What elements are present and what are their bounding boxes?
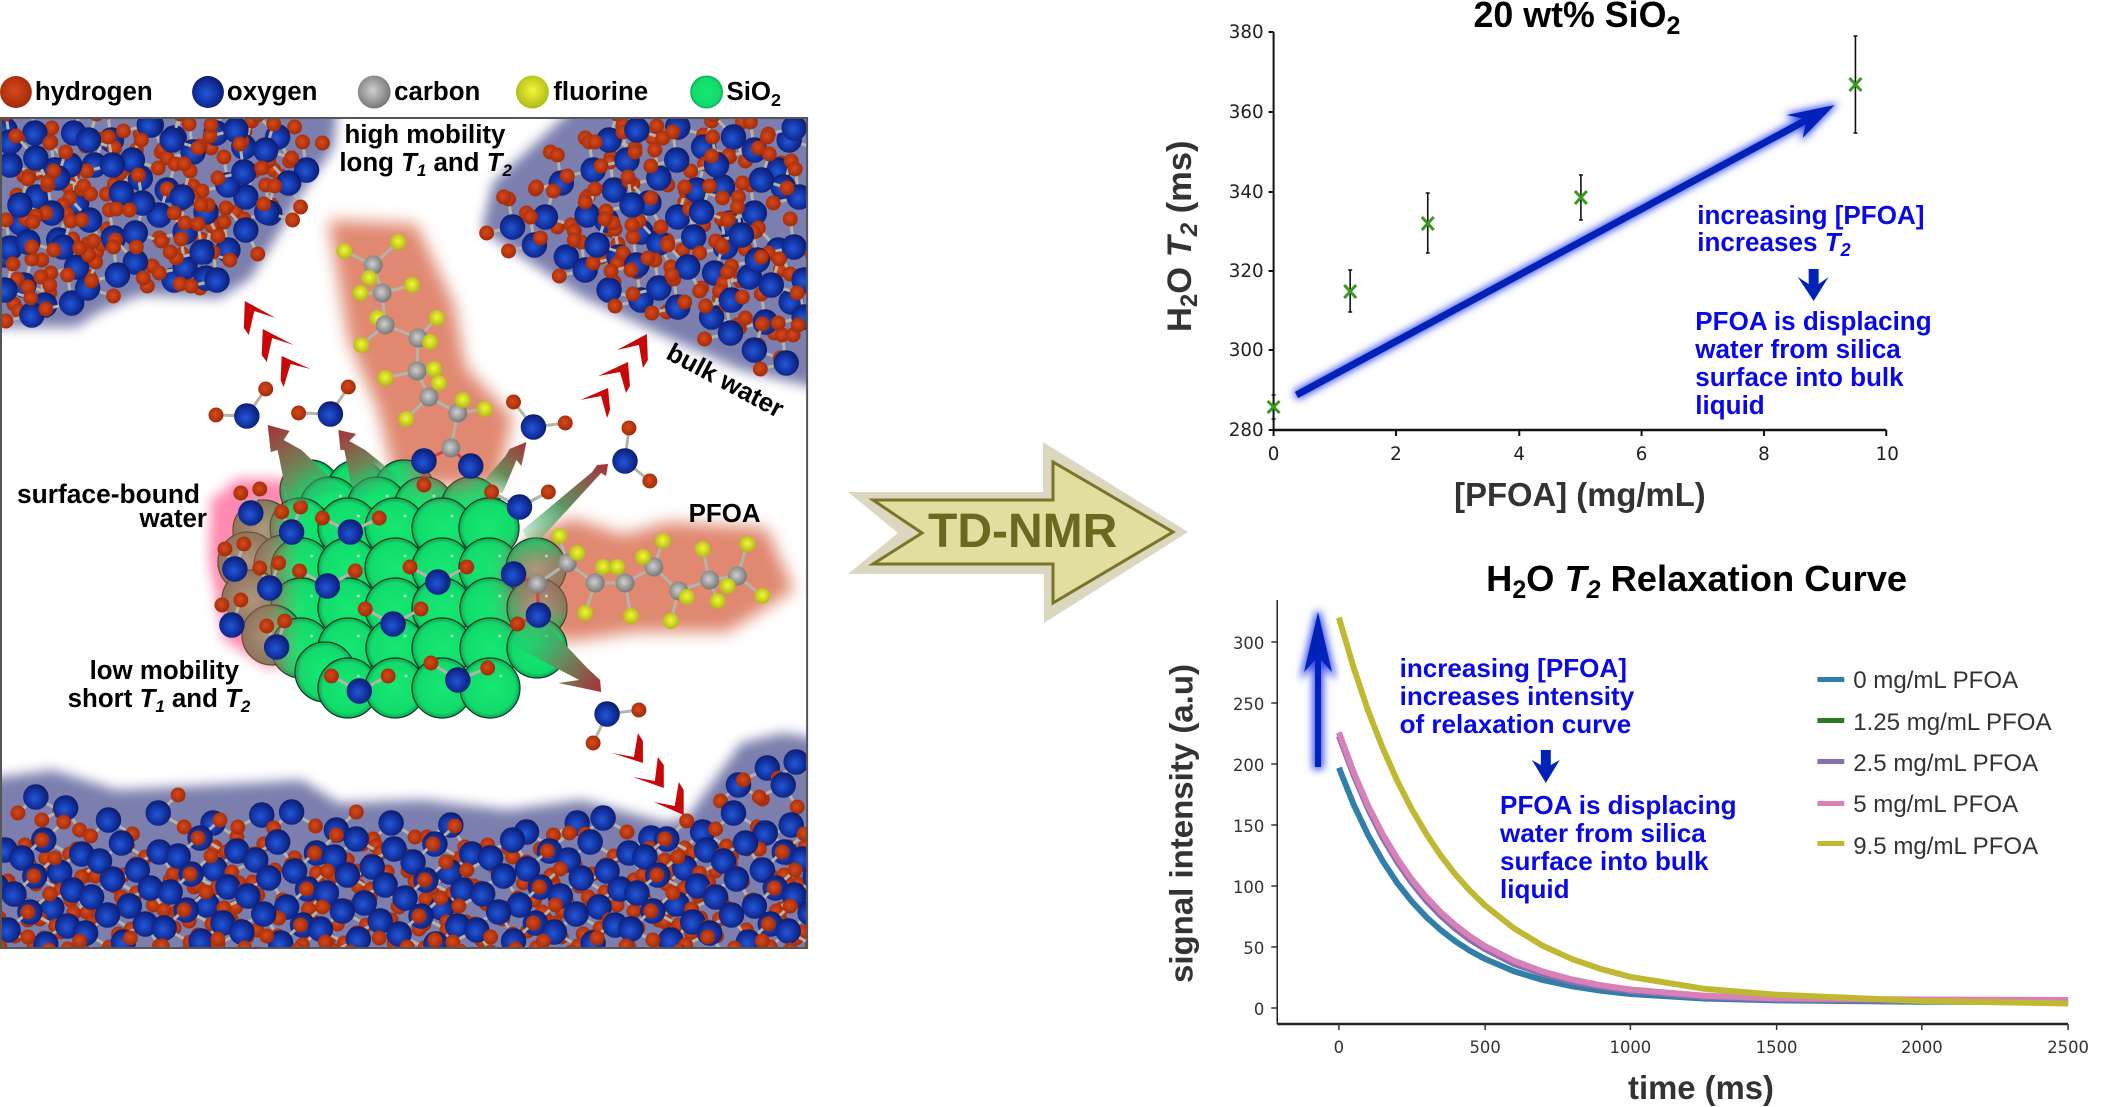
annotation: PFOA is displacing water: liquid	[1500, 874, 1570, 904]
label: high mobility: high mobility	[345, 121, 506, 149]
chart title: 2	[1512, 576, 1526, 604]
label: water: water	[138, 505, 207, 533]
trend arrow	[1295, 105, 1835, 398]
y axis label: (ms)	[1161, 141, 1199, 223]
label: PFOA: PFOA	[689, 500, 761, 528]
annotation: PFOA is displacing water: water from silica	[1694, 334, 1901, 364]
silica nanoparticle	[218, 460, 567, 718]
arrow: TD-NMR	[848, 442, 1188, 623]
bulk water region: top right	[475, 119, 806, 394]
x axis label: time (ms)	[1628, 1069, 1774, 1106]
label: long T1 and T2: 1	[417, 161, 426, 180]
x tick labels	[1334, 1038, 2089, 1057]
annotation: PFOA is displacing water: PFOA is displacing	[1500, 790, 1737, 820]
y tick labels: 150	[1233, 817, 1264, 836]
x tick labels: 0	[1268, 444, 1279, 465]
y tick labels	[1233, 634, 1264, 1019]
annotation: increasing PFOA increases T2: increases T	[1697, 227, 1841, 257]
chart title: Relaxation Curve	[1601, 558, 1907, 599]
annotation: PFOA is displacing water	[1694, 306, 1932, 420]
x axis label: [PFOA] (mg/mL)	[1454, 476, 1706, 513]
small arrow down	[1532, 750, 1560, 783]
chart title: T	[1565, 558, 1589, 599]
legend item: fluorine	[516, 76, 648, 108]
chart legend: 1.25 mg/mL PFOA	[1853, 709, 2052, 736]
y tick labels: 280	[1229, 420, 1264, 441]
small arrow down	[1798, 269, 1829, 301]
legend item: carbon: carbon	[394, 78, 480, 106]
chart title: 2	[1586, 576, 1601, 604]
red chevrons: top left	[244, 301, 311, 387]
arrow: TD-NMR: TD-NMR	[928, 505, 1117, 558]
y axis label: 2	[1176, 294, 1203, 307]
annotation: PFOA is displacing water: water from silica	[1499, 818, 1706, 848]
chart legend	[1817, 667, 2052, 860]
x tick labels: 6	[1636, 444, 1647, 465]
x tick labels: 1000	[1610, 1038, 1651, 1057]
y tick labels: 50	[1243, 939, 1264, 958]
y axis label: signal intensity (a.u)	[1163, 664, 1200, 983]
y tick labels	[1229, 22, 1264, 441]
y axis label: H	[1161, 307, 1199, 332]
legend item: carbon	[358, 76, 480, 108]
vertical increase arrow	[1304, 612, 1332, 767]
legend item: hydrogen	[0, 76, 153, 108]
annotation: PFOA is displacing water: surface into bulk	[1695, 362, 1904, 392]
label: long T1 and T2: long T	[339, 149, 417, 177]
legend item: oxygen	[192, 76, 317, 108]
y tick labels: 100	[1233, 878, 1264, 897]
surface-bound water molecules	[214, 482, 548, 704]
curve: 5 mg/mL	[1339, 732, 2068, 1000]
arrows leaving silica surface	[268, 425, 608, 692]
label: long T1 and T2: and	[426, 149, 487, 177]
annotation: PFOA is displacing water	[1499, 790, 1737, 904]
x tick labels	[1268, 444, 1899, 465]
chart legend: 5 mg/mL PFOA	[1853, 791, 2019, 818]
y tick labels: 380	[1229, 22, 1264, 43]
PFOA highlight: upper chain	[328, 220, 513, 485]
label: short T1 and T2: T	[225, 685, 243, 713]
panel frame	[1, 118, 807, 948]
y axis label: T	[1161, 233, 1199, 257]
label: short T1 and T2: 2	[240, 697, 251, 716]
PFOA molecule: upper chain	[336, 234, 493, 492]
legend item: SiO2	[690, 76, 781, 110]
legend item: hydrogen: hydrogen	[35, 78, 153, 106]
axes and ticks	[1271, 600, 2068, 1030]
legend: atom key	[0, 76, 781, 110]
label: short T1 and T2: and	[165, 685, 225, 713]
annotation: PFOA is displacing water: PFOA is displacing	[1695, 306, 1932, 336]
y axis label: O	[1161, 257, 1199, 294]
chart legend: 0 mg/mL PFOA	[1853, 667, 2019, 694]
error bars	[1272, 36, 1857, 419]
x tick labels: 4	[1513, 444, 1525, 465]
annotation: increasing PFOA increases intensity	[1400, 653, 1635, 739]
label: short T1 and T2: short T	[68, 685, 155, 713]
annotation: PFOA is displacing water: liquid	[1695, 390, 1765, 420]
label: surface-bound water: surface-bound	[17, 479, 200, 509]
annotation: increasing PFOA increases T2: increasing [PFOA]	[1697, 200, 1924, 230]
legend item: SiO2: 2	[771, 90, 781, 110]
x tick labels: 0	[1334, 1038, 1344, 1057]
chart title: H	[1486, 558, 1512, 599]
curve: 0 mg/mL	[1339, 768, 2068, 1002]
y tick labels: 200	[1233, 756, 1264, 775]
y tick labels: 0	[1254, 1000, 1264, 1019]
annotation: increasing PFOA increases intensity: increasing [PFOA]	[1400, 653, 1627, 683]
x tick labels: 8	[1758, 444, 1770, 465]
annotation: PFOA is displacing water: surface into bulk	[1500, 846, 1709, 876]
bulk water region: bottom	[2, 725, 806, 947]
label: short T1 and T2: 1	[155, 697, 165, 716]
label: bulk water: bulk water	[662, 339, 788, 424]
legend item: oxygen: oxygen	[227, 78, 317, 106]
chart title: 2	[1666, 12, 1680, 40]
chart legend: 2.5 mg/mL PFOA	[1853, 750, 2039, 777]
annotation: increasing PFOA increases intensity: of relaxation curve	[1400, 709, 1631, 739]
chart title: O	[1526, 558, 1565, 599]
x tick labels: 10	[1876, 444, 1899, 465]
red chevrons: top right	[580, 334, 648, 418]
y tick labels: 340	[1229, 182, 1264, 203]
curve: 9.5 mg/mL	[1339, 618, 2068, 1004]
y tick labels: 360	[1229, 102, 1264, 123]
y tick labels: 300	[1229, 340, 1264, 361]
curve: 1.25 mg/mL and 2.5 mg/mL	[1339, 736, 2068, 1002]
water molecule leaving surface (foreground)	[484, 484, 556, 520]
legend item: fluorine: fluorine	[553, 78, 648, 106]
y tick labels: 300	[1233, 634, 1264, 653]
pink glow: surface-bound water	[209, 478, 299, 668]
red chevrons: bottom	[612, 733, 684, 815]
x tick labels: 2500	[2047, 1038, 2089, 1057]
label: long T1 and T2: 2	[501, 161, 512, 180]
y tick labels: 250	[1233, 695, 1264, 714]
annotation: increasing PFOA increases T2: 2	[1840, 240, 1851, 260]
y tick labels: 320	[1229, 261, 1264, 282]
legend item: SiO2: SiO	[726, 78, 771, 106]
PFOA molecule: right chain	[501, 528, 770, 632]
PFOA highlight: right chain	[525, 518, 794, 642]
panel: molecular schematic	[0, 117, 808, 949]
x tick labels: 2000	[1901, 1038, 1943, 1057]
chart: T2 vs PFOA concentration	[1161, 0, 1932, 513]
data points	[1268, 78, 1861, 413]
free water molecules	[208, 380, 657, 750]
x tick labels: 2	[1390, 444, 1402, 465]
label: long T1 and T2: T	[487, 149, 505, 177]
chart legend: 9.5 mg/mL PFOA	[1853, 833, 2039, 860]
bulk water region: top left	[0, 90, 338, 328]
annotation: increasing PFOA increases intensity: increases intensity	[1400, 681, 1635, 711]
axes and ticks	[1269, 32, 1886, 436]
x tick labels: 500	[1469, 1038, 1501, 1057]
chart: T2 relaxation curve	[1163, 558, 2089, 1106]
label: low mobility: low mobility	[90, 657, 240, 685]
annotation: increasing PFOA increases T2	[1697, 200, 1924, 260]
x tick labels: 1500	[1756, 1038, 1797, 1057]
y axis label: 2	[1176, 222, 1203, 237]
